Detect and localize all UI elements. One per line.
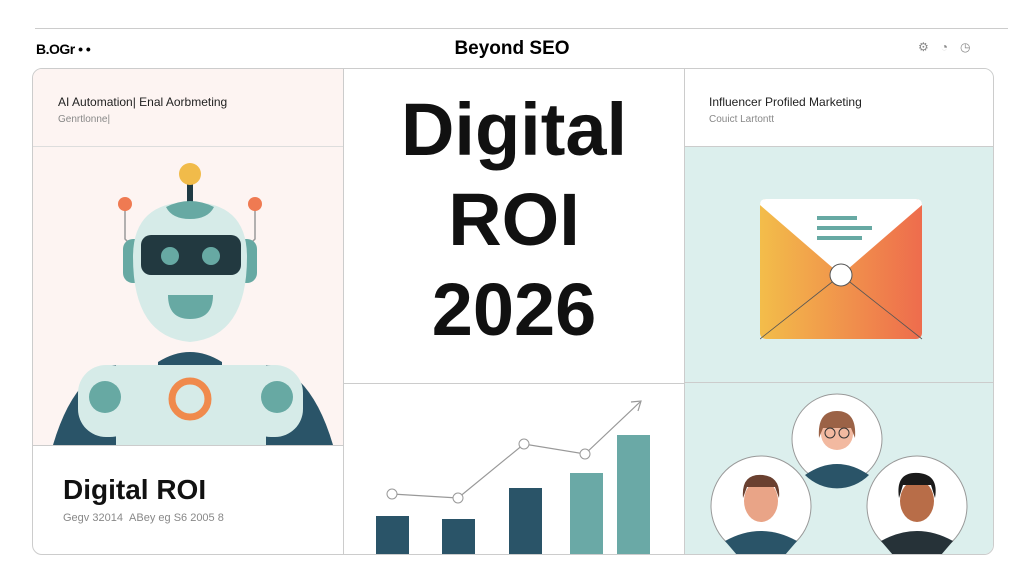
logo: B.OGr • • bbox=[36, 41, 90, 57]
bar chart bbox=[344, 383, 684, 555]
panel: digital ROI caption bbox=[33, 445, 344, 555]
panel: AI automation bbox=[33, 69, 344, 445]
icon: envelope bbox=[760, 199, 922, 340]
main title: ROI bbox=[448, 178, 580, 261]
panel: influencer marketing bbox=[684, 69, 994, 554]
header icons: ⚙◔◷ bbox=[918, 40, 982, 54]
header title: Beyond SEO bbox=[454, 38, 570, 59]
main card bbox=[32, 68, 994, 555]
panel subtitle: Couict Lartontt bbox=[709, 114, 774, 125]
main title: Digital bbox=[401, 88, 627, 171]
main title bbox=[401, 88, 627, 351]
icon: influencer avatars bbox=[710, 394, 968, 554]
panel heading: Influencer Profiled Marketing bbox=[709, 95, 862, 109]
panel subtitle: Genrtlonne| bbox=[58, 114, 110, 125]
main title: 2026 bbox=[432, 268, 596, 351]
icon: robot bbox=[53, 163, 333, 445]
caption subtitle: Gegv 32014 ABey eg S6 2005 8 bbox=[63, 512, 224, 524]
panel heading: AI Automation| Enal Aorbmeting bbox=[58, 95, 227, 109]
caption heading: Digital ROI bbox=[63, 474, 206, 505]
